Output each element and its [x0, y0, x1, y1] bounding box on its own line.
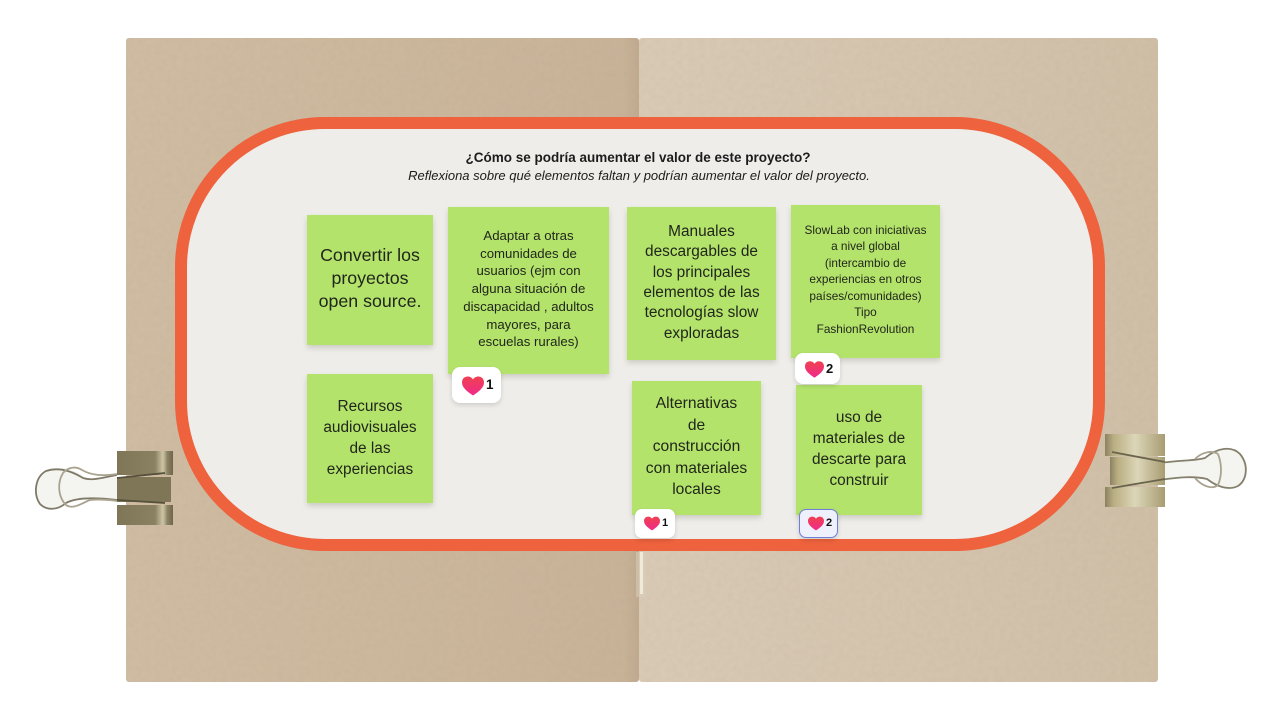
sticky note: open source: open source. — [319, 290, 421, 310]
sticky note: recursos audiovisuales — [307, 374, 433, 503]
sticky note: recursos audiovisuales: experiencias — [327, 460, 413, 478]
sticky note: SlowLab global: FashionRevolution — [817, 322, 914, 336]
sticky note: alternativas de construcción: locales — [672, 481, 721, 498]
sticky note: SlowLab global — [791, 205, 940, 358]
sticky note: adaptar a otras comunidades: Adaptar a otras — [483, 228, 574, 243]
sticky note: alternativas de construcción — [632, 381, 761, 515]
left binder clip — [35, 451, 173, 525]
subtitle: Reflexiona sobre qué elementos faltan y podrían aumentar el valor del proyecto. — [408, 168, 870, 183]
sticky note: adaptar a otras comunidades: usuarios (ejm con — [476, 263, 581, 278]
sticky note: recursos audiovisuales: audiovisuales — [323, 418, 417, 436]
sticky note: adaptar a otras comunidades: escuelas rurales) — [478, 334, 579, 349]
panel: rounded orange frame — [175, 117, 1105, 551]
reaction badge: 2 hearts selected on descarte: 2 — [826, 517, 832, 529]
reaction badge: 1 heart on adaptar — [452, 367, 501, 403]
sticky note: alternativas de construcción: con materiales — [646, 460, 747, 477]
reaction badge: 1 heart on adaptar: 1 — [486, 377, 494, 392]
sticky note: SlowLab global: SlowLab con iniciativas — [805, 223, 926, 237]
sticky note: manuales descargables: descargables de — [645, 243, 758, 260]
sticky note: manuales descargables: Manuales — [668, 223, 735, 240]
sticky note: manuales descargables: tecnologías slow — [645, 304, 758, 321]
reaction badge: 1 heart on alternativas: 1 — [662, 517, 668, 529]
sticky note: manuales descargables — [627, 207, 776, 360]
sticky note: SlowLab global: Tipo — [854, 305, 877, 319]
sticky note: adaptar a otras comunidades: alguna situación de — [472, 281, 585, 296]
reaction badge: 2 hearts selected on descarte — [799, 509, 838, 538]
sticky note: SlowLab global: experiencias en otros — [809, 272, 922, 286]
sticky note: alternativas de construcción: construcción — [653, 438, 740, 455]
sticky note: materiales de descarte: descarte para — [812, 451, 906, 468]
sticky note: manuales descargables: elementos de las — [643, 284, 760, 301]
sticky note: adaptar a otras comunidades: mayores, para — [486, 317, 571, 332]
sticky note: adaptar a otras comunidades: discapacidad , adultos — [463, 299, 594, 314]
sticky note: adaptar a otras comunidades — [448, 207, 609, 374]
sticky note: manuales descargables: los principales — [653, 264, 750, 281]
sticky note: adaptar a otras comunidades: comunidades de — [480, 246, 577, 260]
sticky note: SlowLab global: países/comunidades) — [809, 289, 922, 303]
sticky note: open source: proyectos — [331, 268, 409, 288]
reaction badge: 2 hearts on SlowLab: 2 — [826, 361, 833, 376]
reaction badge: 1 heart on alternativas — [635, 509, 675, 538]
sticky note: materiales de descarte: construir — [829, 472, 888, 489]
sticky note: materiales de descarte: materiales de — [813, 430, 905, 447]
sticky note: open source: Convertir los — [320, 244, 420, 264]
sticky note: materiales de descarte: uso de — [836, 409, 882, 426]
sticky note: SlowLab global: (intercambio de — [825, 256, 906, 270]
sticky note: alternativas de construcción: Alternativas — [656, 395, 737, 412]
sticky note: open source — [307, 215, 433, 345]
right binder clip — [1105, 434, 1247, 507]
sticky note: materiales de descarte — [796, 385, 922, 515]
reaction badge: 2 hearts on SlowLab — [795, 353, 840, 384]
title: ¿Cómo se podría aumentar el valor de este proyecto? — [465, 150, 811, 165]
sticky note: recursos audiovisuales: de las — [349, 440, 391, 456]
sticky note: SlowLab global: a nivel global — [831, 239, 900, 253]
sticky note: recursos audiovisuales: Recursos — [337, 398, 402, 414]
sticky note: manuales descargables: exploradas — [664, 325, 739, 342]
sticky note: alternativas de construcción: de — [688, 417, 705, 434]
